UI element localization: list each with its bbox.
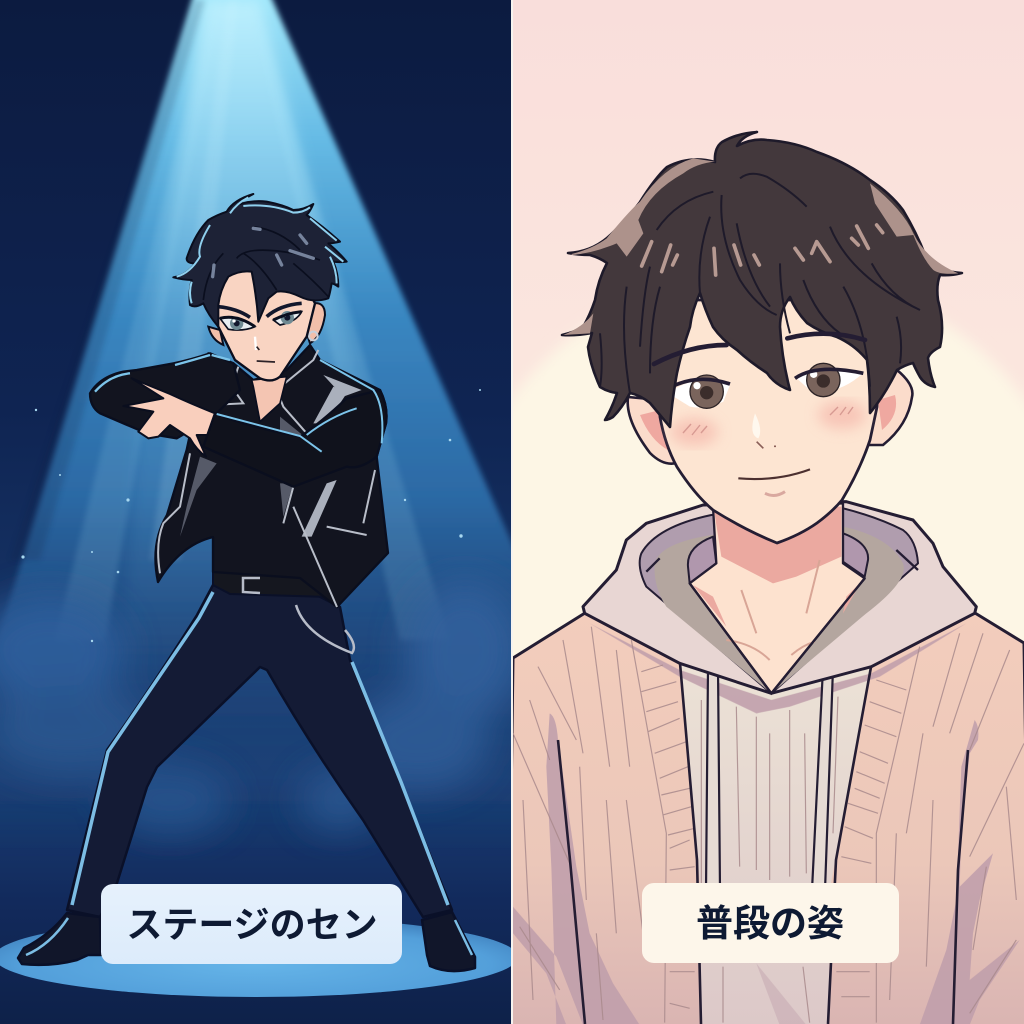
- face: [216, 272, 316, 382]
- neck lines: [726, 560, 820, 660]
- forearm rim light: [217, 360, 382, 452]
- label: everyday: [642, 883, 899, 963]
- jacket lining: [180, 417, 307, 537]
- spotlight beam: [6, 0, 511, 723]
- hoodie drawstrings: [706, 664, 833, 890]
- hair details: [563, 158, 958, 393]
- neck shadow: [693, 507, 861, 627]
- right ear: [868, 370, 912, 445]
- boot highlights: [26, 918, 472, 955]
- lower lip: [765, 492, 785, 495]
- upper body: [90, 194, 388, 607]
- sweater shadows: [513, 623, 1020, 1024]
- neck: [690, 503, 865, 693]
- inner fold shade: [688, 533, 868, 583]
- hood outer: [583, 502, 976, 693]
- neck: [252, 377, 287, 422]
- trouser highlights: [72, 592, 448, 905]
- knit ribs: [513, 627, 1024, 1023]
- cream halo: [513, 297, 1024, 656]
- hood lining: [654, 527, 904, 693]
- hood opening ring: [640, 508, 918, 693]
- folded forearm: [203, 390, 387, 487]
- hair rim light: [177, 197, 343, 303]
- character: everyday boy: [508, 132, 1024, 1024]
- face details: [663, 363, 863, 495]
- stage fog: [0, 580, 525, 835]
- label: stage: [101, 884, 402, 964]
- right eye: [795, 363, 863, 397]
- cheek blush: [670, 401, 866, 446]
- arm rim light: [95, 355, 230, 392]
- right boot: [422, 912, 475, 971]
- hair highlights: [642, 225, 883, 275]
- ear shading: [640, 395, 896, 450]
- eyebrows: [654, 334, 865, 364]
- inner shirt: [680, 663, 871, 1024]
- label: everyday: 普段の姿: [696, 903, 844, 944]
- hair: [173, 194, 347, 327]
- raised arm: [90, 353, 240, 438]
- panel: stage persona: [0, 0, 511, 1024]
- mouth and nose: [255, 337, 275, 362]
- jacket body: [155, 345, 388, 607]
- stage floor ellipse: [0, 917, 518, 997]
- earring: [309, 332, 318, 340]
- hair strands and highlights: [203, 227, 328, 300]
- blush marks: [683, 407, 853, 435]
- face: [650, 300, 880, 543]
- ears: [208, 303, 325, 345]
- mouth: [738, 469, 810, 479]
- left eye: [663, 375, 730, 408]
- sweater fold lines: [558, 663, 968, 1024]
- hand: [123, 378, 215, 457]
- belt and chain: [213, 570, 354, 653]
- left ear: [628, 397, 680, 464]
- hair strand lines: [600, 174, 920, 393]
- sparkle particles: [21, 389, 481, 642]
- hood: [583, 502, 976, 693]
- hood front edge: [646, 550, 918, 693]
- trousers: [67, 585, 452, 917]
- nose: [752, 413, 776, 448]
- panel divider: [511, 0, 513, 1024]
- left boot: [18, 913, 101, 965]
- jacket trim: [158, 350, 375, 607]
- eyes: [220, 311, 302, 330]
- sweater body: [508, 613, 1024, 1024]
- hair lighter tips: [563, 158, 958, 335]
- character: dancer: [18, 194, 475, 971]
- eyebrows: [218, 303, 302, 317]
- label: stage: ステージのセン: [126, 904, 378, 945]
- hair: [562, 132, 962, 427]
- silver bands: [302, 375, 362, 537]
- panel: everyday persona: [513, 0, 1024, 1024]
